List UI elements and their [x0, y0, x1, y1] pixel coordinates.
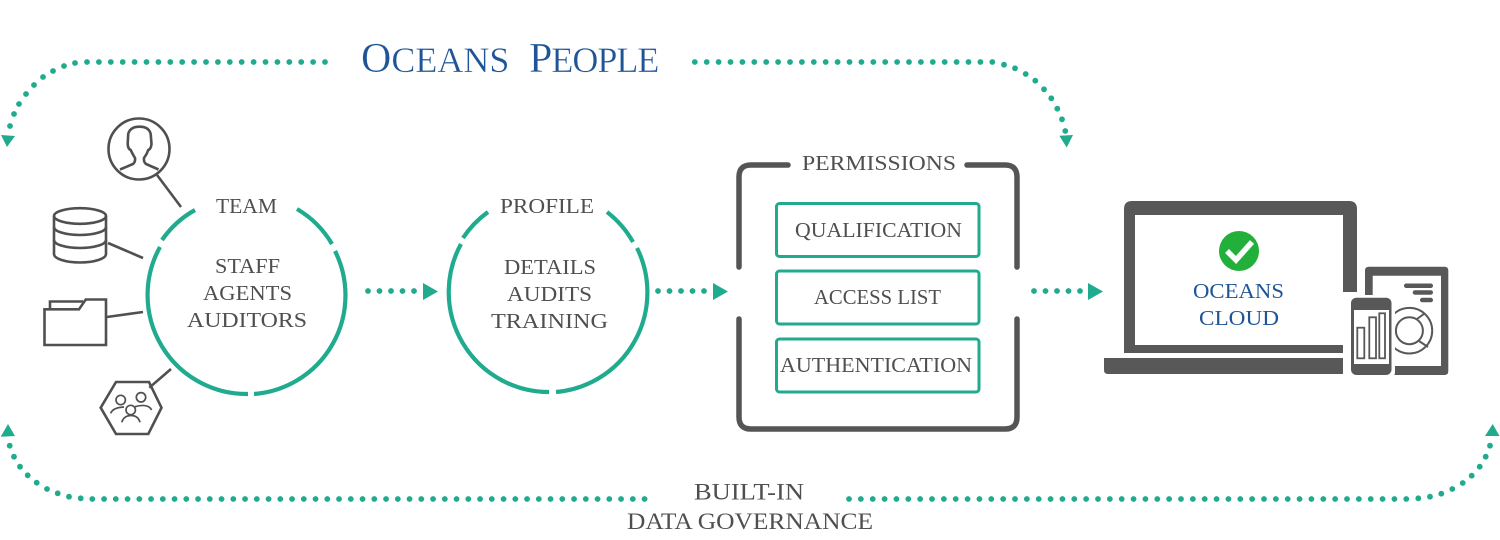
- team list: STAFF: [215, 254, 280, 278]
- permissions bracket: [739, 165, 1017, 429]
- title: OCEANS: [361, 36, 509, 82]
- box: access list: [776, 271, 979, 324]
- icon: database: [54, 208, 143, 262]
- panel: team circle: [148, 194, 345, 394]
- icon: people hexagon: [101, 369, 171, 434]
- icon: green check: [1219, 231, 1259, 271]
- caption: built-in data governance: DATA GOVERNANCE: [627, 509, 873, 534]
- icon: tablet: [1365, 267, 1448, 375]
- arrow: team to profile: [368, 283, 438, 300]
- panel: permissions: [739, 151, 1017, 429]
- profile list: TRAINING: [491, 309, 608, 333]
- box: authentication: AUTHENTICATION: [780, 353, 972, 377]
- icon: user: [108, 118, 181, 207]
- panel: profile circle: [449, 194, 647, 392]
- box: qualification: QUALIFICATION: [795, 218, 962, 242]
- icon: laptop: [1104, 201, 1357, 374]
- caption: built-in data governance: [627, 480, 873, 534]
- box: access list: ACCESS LIST: [814, 285, 941, 309]
- team list: AGENTS: [203, 281, 292, 305]
- title: P: [529, 36, 551, 82]
- arrow: top left dotted loop: [1, 60, 326, 147]
- heading: profile: PROFILE: [500, 194, 594, 218]
- arrow: permissions to cloud: [1034, 283, 1103, 300]
- panel: oceans cloud devices: [1104, 201, 1448, 379]
- team circle ring: [148, 209, 345, 394]
- box: qualification: [776, 204, 979, 256]
- profile circle ring: [449, 212, 647, 392]
- profile list: [491, 255, 608, 333]
- title: EOPLE: [551, 40, 658, 80]
- arrow: bottom left dotted loop: [1, 424, 646, 501]
- label: oceans cloud: CLOUD: [1199, 306, 1279, 330]
- ring chart: [1387, 308, 1432, 354]
- profile list: DETAILS: [504, 255, 596, 279]
- caption: built-in data governance: BUILT-IN: [694, 480, 804, 504]
- profile list: AUDITS: [507, 282, 592, 306]
- icon: phone: [1343, 292, 1395, 379]
- box: authentication: [776, 339, 979, 392]
- heading: team: TEAM: [216, 194, 277, 218]
- team list: [187, 254, 307, 332]
- arrow: profile to permissions: [658, 283, 728, 300]
- arrow: top right dotted loop: [695, 62, 1073, 148]
- label: oceans cloud: OCEANS: [1193, 279, 1284, 303]
- icon: folder: [44, 300, 143, 345]
- label: oceans cloud: [1193, 279, 1284, 330]
- arrow: bottom right dotted loop: [849, 424, 1500, 501]
- team list: AUDITORS: [187, 308, 307, 332]
- heading: permissions: PERMISSIONS: [802, 151, 956, 175]
